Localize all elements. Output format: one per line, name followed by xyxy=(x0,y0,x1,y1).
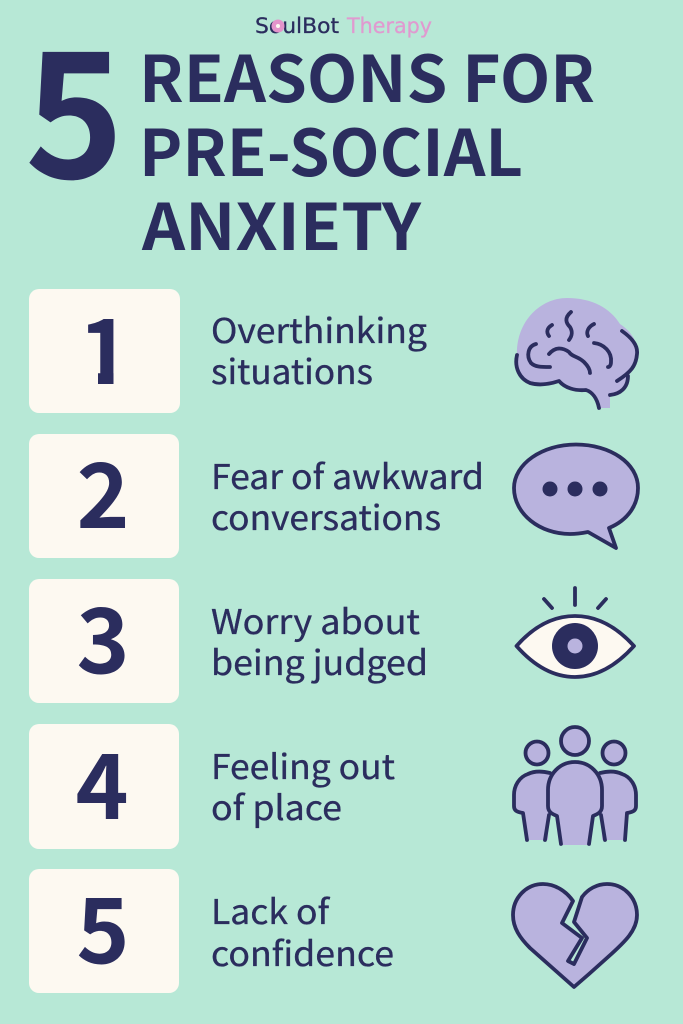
number card 2 xyxy=(29,424,179,558)
title text: PRE-SOCIAL xyxy=(139,103,523,195)
row 1: overthinking situations xyxy=(29,280,637,413)
text: fear of awkward conversations: conversations xyxy=(211,491,441,540)
text: lack of confidence: confidence xyxy=(211,927,394,976)
logo: SoulBot Therapy: SoulBot xyxy=(255,14,339,38)
text: lack of confidence: Lack of xyxy=(211,885,331,934)
number card 4: 4 xyxy=(75,715,129,845)
text: feeling out of place xyxy=(211,740,395,830)
text: fear of awkward conversations xyxy=(211,450,484,540)
title text xyxy=(139,29,595,269)
row 5: lack of confidence xyxy=(29,859,637,993)
row 2: fear of awkward conversations xyxy=(29,424,638,558)
icon: group of people xyxy=(514,727,636,845)
text: worry about being judged xyxy=(211,595,428,685)
number card 1: 1 xyxy=(78,280,132,410)
number card 5 xyxy=(29,859,179,993)
number card 3 xyxy=(29,569,179,703)
text: worry about being judged: being judged xyxy=(211,636,428,685)
text: fear of awkward conversations: Fear of awkward xyxy=(211,450,484,499)
title text: REASONS FOR xyxy=(139,29,595,121)
text: overthinking situations: Overthinking xyxy=(211,304,427,353)
text: worry about being judged: Worry about xyxy=(211,595,420,644)
text: overthinking situations: situations xyxy=(211,345,373,394)
icon: brain xyxy=(516,298,637,408)
number card 5: 5 xyxy=(76,859,130,989)
icon: eye xyxy=(516,588,634,677)
text: lack of confidence xyxy=(211,885,394,976)
text: feeling out of place: of place xyxy=(211,781,342,830)
icon: broken heart xyxy=(513,884,637,987)
logo: SoulBot Therapy: Therapy xyxy=(346,14,432,38)
row 4: feeling out of place xyxy=(29,715,636,849)
icon: speech bubble xyxy=(514,444,638,548)
number card 4 xyxy=(29,715,179,849)
title xyxy=(25,0,595,269)
number card 2: 2 xyxy=(76,424,130,554)
title text: ANXIETY xyxy=(141,177,422,269)
number card 3: 3 xyxy=(76,569,130,699)
text: overthinking situations xyxy=(211,304,427,394)
row 3: worry about being judged xyxy=(29,569,634,703)
number card 1 xyxy=(29,280,180,413)
logo: SoulBot Therapy xyxy=(255,14,432,38)
text: feeling out of place: Feeling out xyxy=(211,740,395,789)
